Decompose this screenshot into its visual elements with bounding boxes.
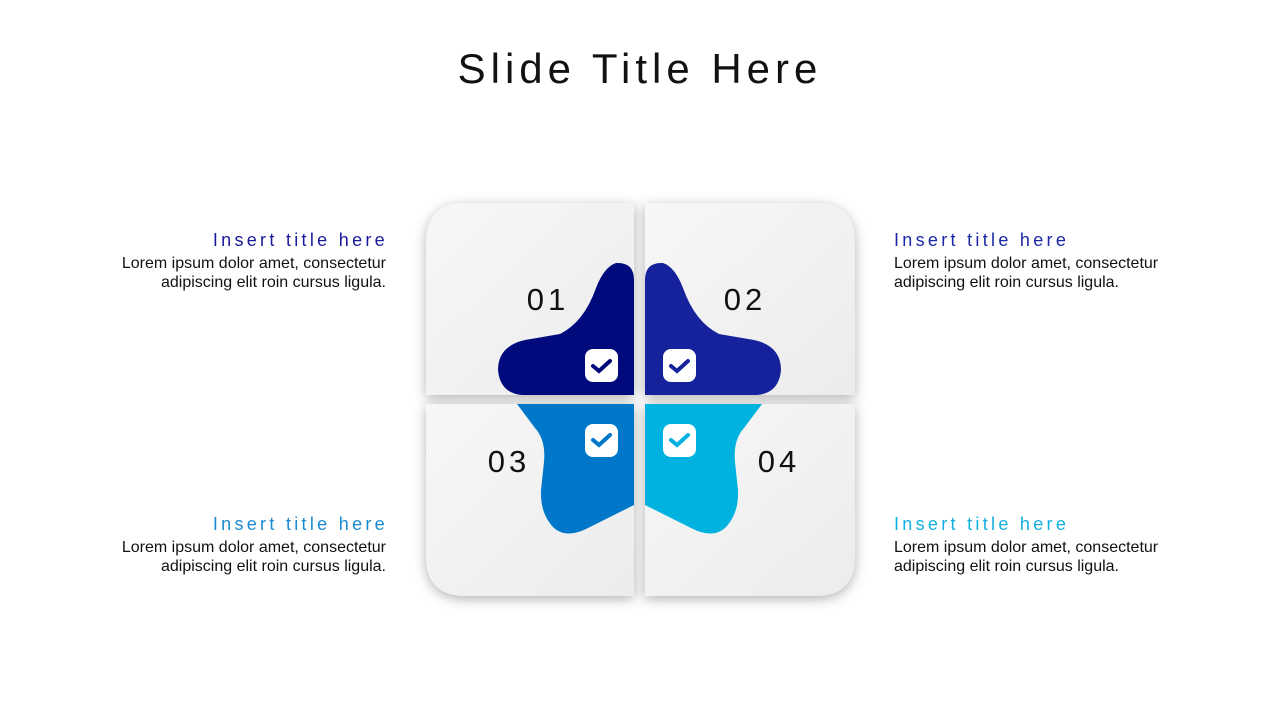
text block: item 1: adipiscing elit roin cursus ligula. <box>161 274 386 291</box>
text block: item 3: adipiscing elit roin cursus ligula. <box>161 558 386 575</box>
text block: item 2: Lorem ipsum dolor amet, consectetur <box>894 255 1158 272</box>
number 03: 03 <box>488 444 530 479</box>
text block: item 4: Insert title here <box>894 514 1069 534</box>
text block: item 3 <box>122 514 388 575</box>
tiles <box>426 203 855 596</box>
star piece 3 <box>517 404 634 534</box>
icon: check 3 <box>585 424 618 457</box>
text block: item 4: Lorem ipsum dolor amet, consectetur <box>894 539 1158 556</box>
text block: item 2 <box>894 230 1158 291</box>
icon: check 1 <box>585 349 618 382</box>
text block: item 2: adipiscing elit roin cursus ligula. <box>894 274 1119 291</box>
star piece 4 <box>645 404 762 534</box>
text block: item 4: adipiscing elit roin cursus ligula. <box>894 558 1119 575</box>
text block: item 1: Insert title here <box>213 230 388 250</box>
number 01: 01 <box>527 282 569 317</box>
text block: item 1 <box>122 230 388 291</box>
icon: check 2 <box>663 349 696 382</box>
text block: item 3: Insert title here <box>213 514 388 534</box>
star piece 1 <box>498 263 634 395</box>
text block: item 2: Insert title here <box>894 230 1069 250</box>
text block: item 1: Lorem ipsum dolor amet, consectetur <box>122 255 386 272</box>
text block: item 3: Lorem ipsum dolor amet, consectetur <box>122 539 386 556</box>
icon: check 4 <box>663 424 696 457</box>
number 04: 04 <box>758 444 800 479</box>
star piece 2 <box>645 263 781 395</box>
number 02: 02 <box>724 282 766 317</box>
text block: item 4 <box>894 514 1158 575</box>
title: Slide Title Here <box>458 45 822 92</box>
